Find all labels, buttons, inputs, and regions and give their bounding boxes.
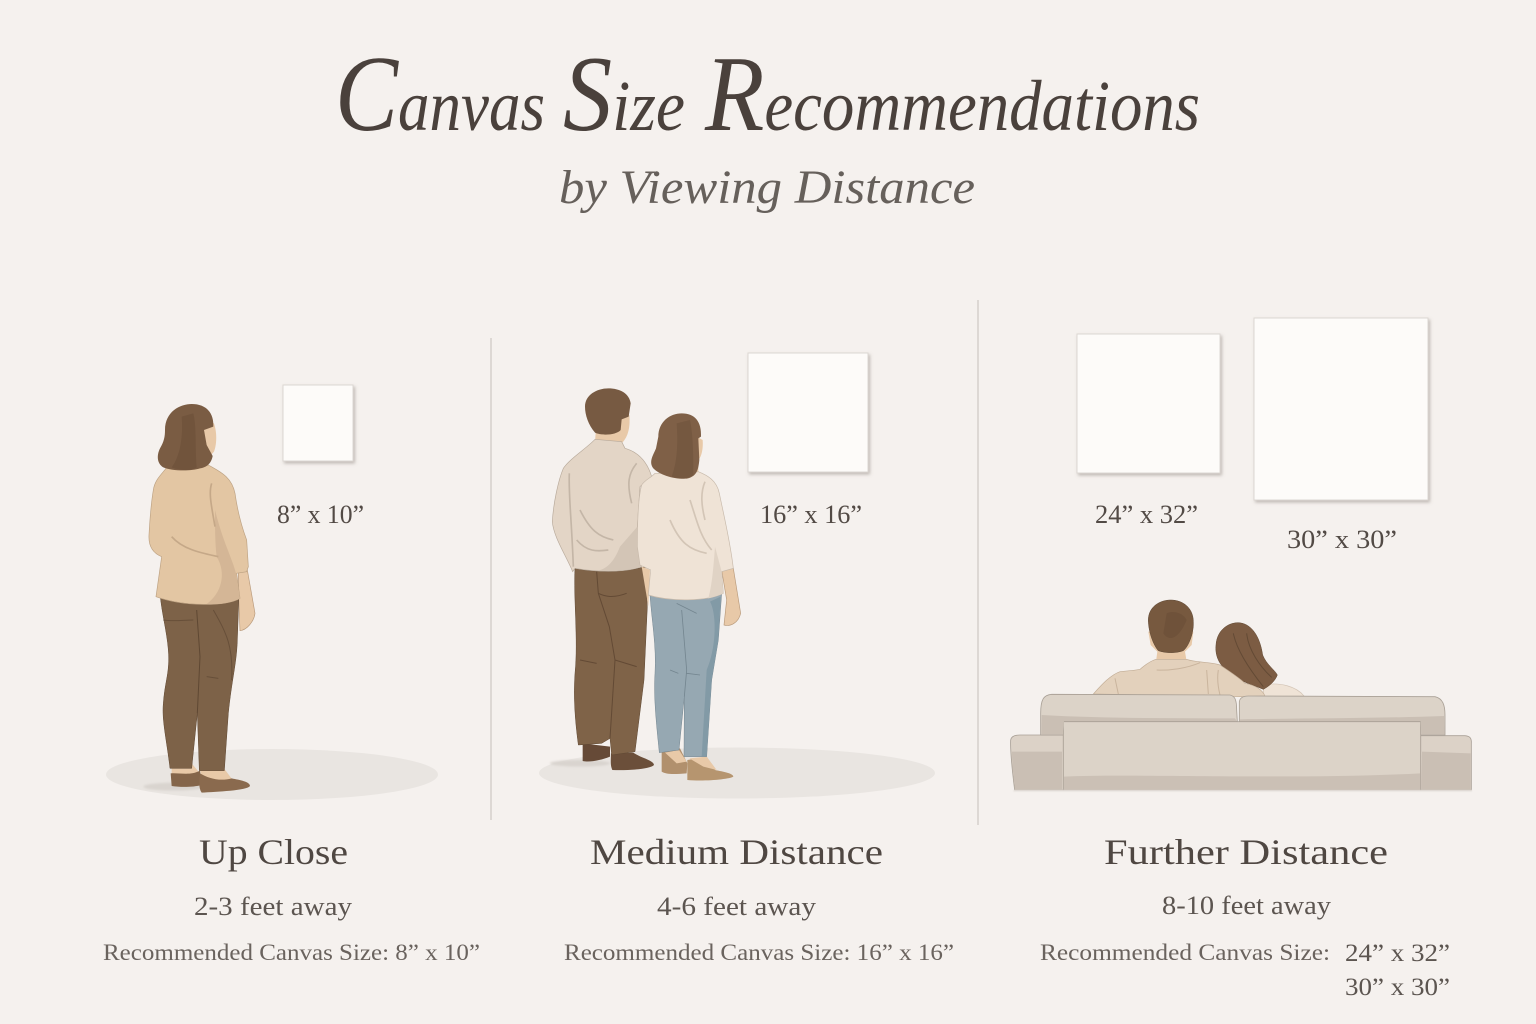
panel: medium distance bbox=[539, 353, 954, 966]
size option 24x32: 24” x 32” bbox=[1345, 940, 1450, 967]
canvas 16x16 bbox=[748, 353, 868, 472]
canvas label 16x16: 16” x 16” bbox=[760, 500, 862, 529]
canvas 8x10 bbox=[283, 385, 353, 461]
panel: further distance bbox=[1011, 318, 1472, 1001]
floor shadow bbox=[539, 748, 935, 798]
canvas 30x30 bbox=[1254, 318, 1428, 500]
canvas label 24x32: 24” x 32” bbox=[1095, 500, 1198, 529]
recommendation: medium: Recommended Canvas Size: 16” x 16” bbox=[564, 940, 954, 966]
man on sofa bbox=[1148, 632, 1193, 662]
panel: up close bbox=[103, 385, 480, 966]
title: Size bbox=[563, 35, 685, 154]
recommendation: further: Recommended Canvas Size: bbox=[1040, 940, 1330, 966]
distance: further: 8-10 feet away bbox=[1162, 891, 1331, 920]
canvas label 30x30: 30” x 30” bbox=[1287, 525, 1397, 554]
canvas 24x32 bbox=[1077, 334, 1220, 473]
title: Canvas bbox=[335, 35, 545, 154]
distance: medium: 4-6 feet away bbox=[657, 892, 816, 921]
divider: left bbox=[490, 338, 492, 820]
sofa bbox=[1011, 694, 1471, 790]
subtitle: by Viewing Distance bbox=[559, 161, 975, 214]
title: Recommendations bbox=[704, 35, 1200, 154]
figure: couple standing bbox=[550, 388, 741, 781]
woman on sofa bbox=[1263, 684, 1304, 697]
heading: medium distance: Medium Distance bbox=[590, 832, 883, 872]
figure: woman bbox=[143, 404, 255, 793]
recommendation: up close: Recommended Canvas Size: 8” x 10” bbox=[103, 940, 480, 966]
heading: up close: Up Close bbox=[199, 832, 348, 872]
figure: couple on sofa bbox=[1011, 600, 1472, 792]
title bbox=[335, 35, 1200, 154]
floor shadow bbox=[106, 749, 438, 800]
heading: further distance: Further Distance bbox=[1104, 832, 1388, 872]
canvas label 8x10: 8” x 10” bbox=[277, 500, 364, 529]
size option 30x30: 30” x 30” bbox=[1345, 974, 1450, 1001]
woman bbox=[662, 748, 687, 774]
divider: right bbox=[977, 300, 979, 825]
distance: up close: 2-3 feet away bbox=[194, 892, 352, 921]
man bbox=[583, 743, 610, 762]
